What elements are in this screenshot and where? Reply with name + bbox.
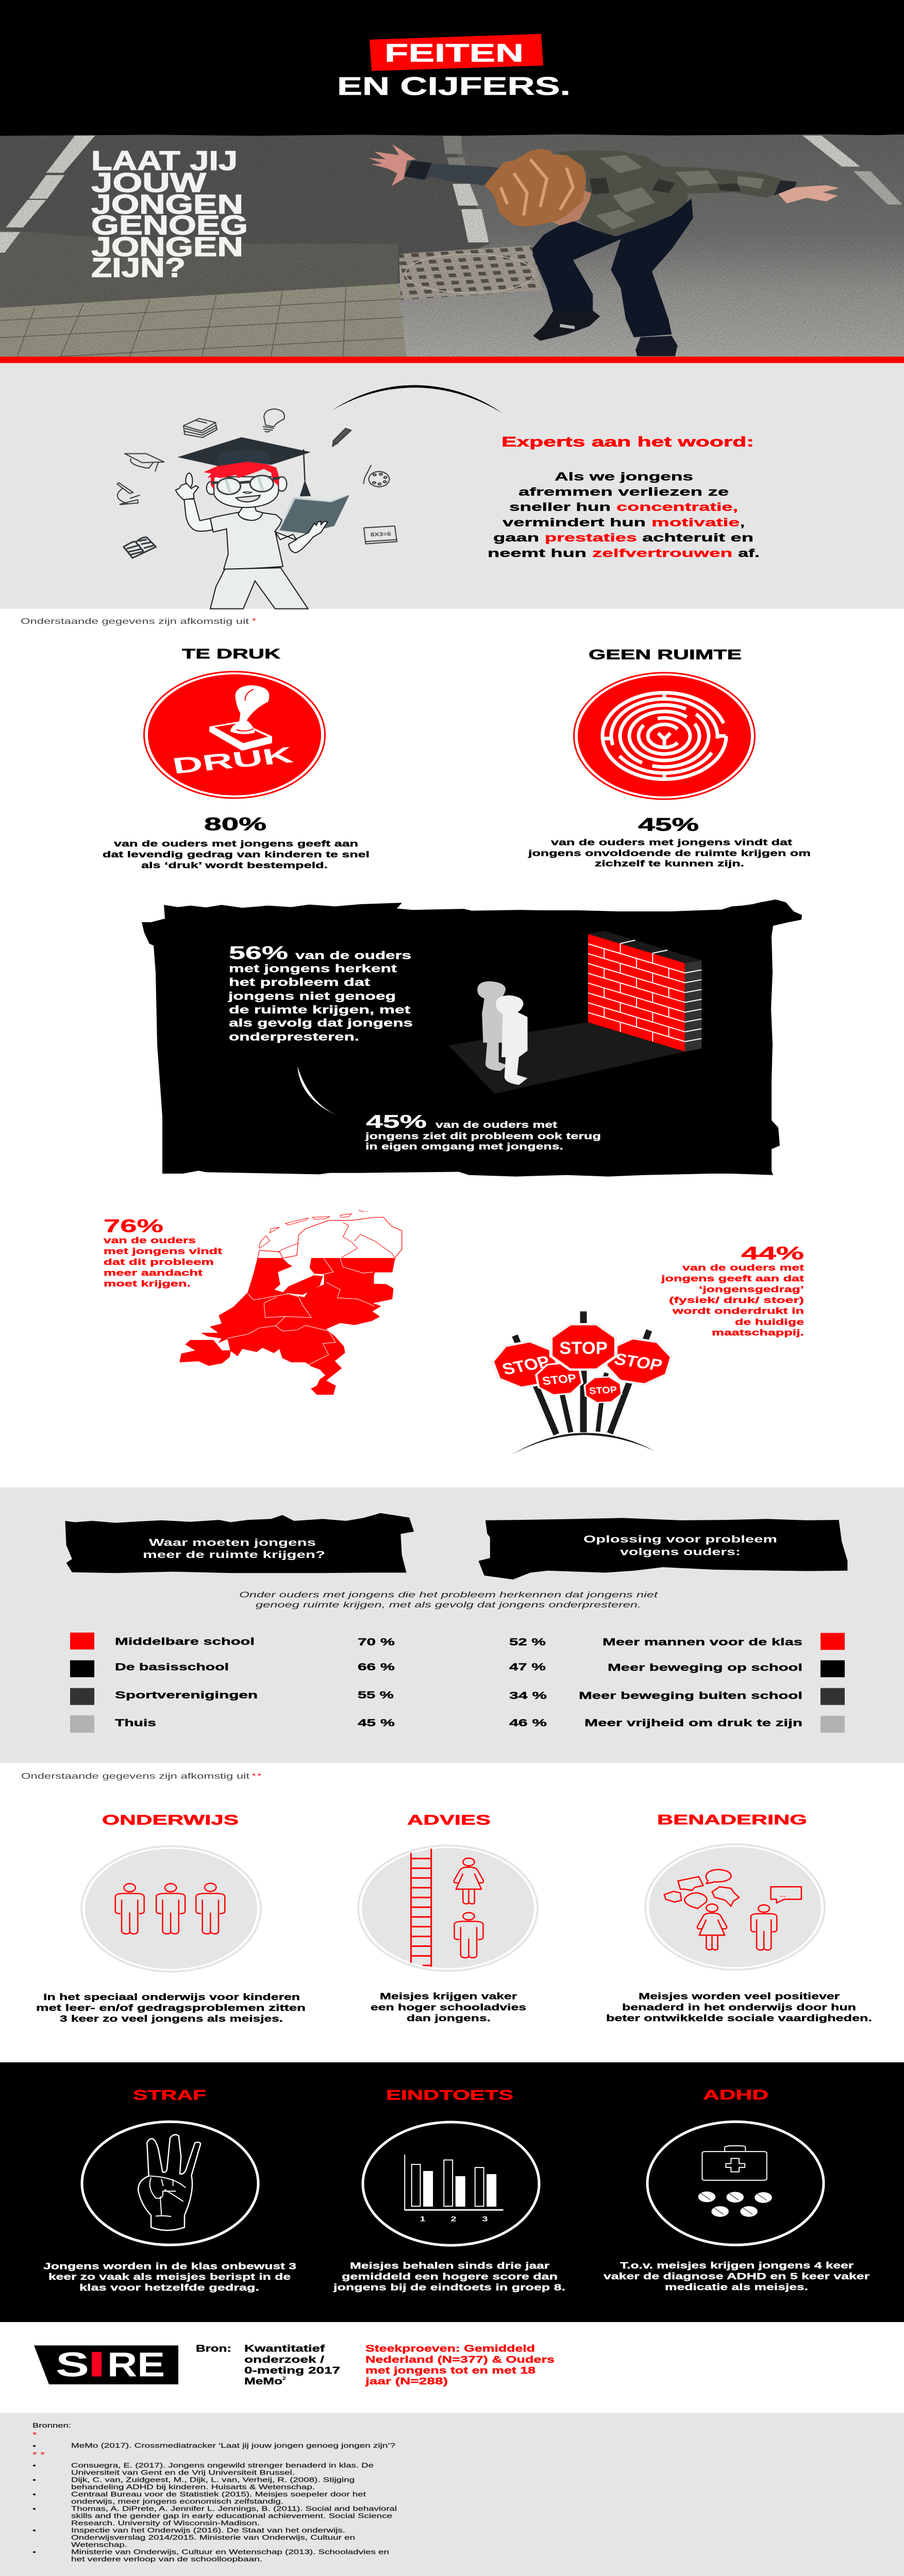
source note 2: ** — [252, 1771, 261, 1780]
list: oplossingen: Meer beweging op school — [608, 1662, 802, 1673]
text: expert statement: af. — [738, 547, 760, 560]
title: Feiten: FEITEN — [384, 39, 524, 67]
text: 80% caption — [103, 839, 370, 870]
list: oplossingen: Meer vrijheid om druk te zijn — [584, 1718, 802, 1728]
stat: 56%: onderpresteren. — [229, 1031, 359, 1043]
banner: waar moeten jongens: Waar moeten jongens — [149, 1537, 316, 1548]
panel: bronnen: Research. University of Wisconsin-Madison. — [71, 2519, 260, 2527]
banner: oplossing — [478, 1518, 847, 1580]
icon: books stack — [183, 418, 217, 437]
heading: geen ruimte: GEEN RUIMTE — [589, 647, 742, 663]
panel: black grunge — [142, 900, 802, 1177]
stat: 45% eigen omgang — [365, 1112, 601, 1151]
list: oplossingen: 46 % — [509, 1718, 547, 1728]
text: eindtoets: Meisjes behalen sinds drie jaar — [350, 2260, 550, 2271]
icon: medicine circle — [647, 2122, 824, 2245]
stat: 44%: 44% — [741, 1244, 804, 1264]
panel: bronnen: Ministerie van Onderwijs, Cultuur en Wetenschap (2013). Schooladvies en — [71, 2548, 389, 2556]
text: italic note: genoeg ruimte krijgen, met als gevolg dat jongens onderpresteren. — [256, 1600, 641, 1609]
stat: 44% — [661, 1244, 804, 1337]
panel: geen ruimte — [528, 647, 811, 869]
panel: black facts — [0, 2062, 904, 2322]
text: expert statement: neemt hun — [488, 547, 587, 560]
panel: bronnen: Bronnen: — [32, 2422, 71, 2429]
ijsselmeer — [274, 1258, 324, 1297]
grain overlay — [0, 134, 904, 357]
panel: bronnen: • — [32, 2526, 36, 2534]
stat: 76%: meer aandacht — [104, 1268, 203, 1278]
text: expert statement: vermindert hun — [503, 516, 646, 529]
text: 45% caption: jongens onvoldoende de ruimte krijgen om — [528, 849, 811, 858]
text: expert statement: prestaties — [545, 531, 637, 544]
text: adhd: medicatie als meisjes. — [665, 2282, 808, 2292]
icon: open book — [124, 537, 156, 558]
road markings — [0, 135, 902, 253]
photo: jumping boy — [369, 144, 840, 356]
stat: 44%: de huidige — [735, 1317, 804, 1327]
panel: bronnen: MeMo (2017). Crossmediatracker ‘Laat jij jouw jongen genoeg jongen zijn’? — [71, 2442, 395, 2449]
list: waar meer ruimte: 45 % — [358, 1718, 395, 1728]
icon: stamp circle: DRUK — [170, 742, 295, 779]
text: italic note: Onder ouders met jongens die het probleem herkennen dat jongens niet — [239, 1590, 659, 1599]
stat: 44%: ‘jongensgedrag’ — [699, 1284, 804, 1294]
stat: 56% — [228, 943, 413, 1043]
heading: onderwijs: ONDERWIJS — [102, 1812, 239, 1827]
panel: experts — [0, 363, 904, 609]
header band — [0, 0, 904, 135]
text: expert statement: , — [740, 516, 745, 529]
text: bron: Kwantitatief — [244, 2343, 325, 2353]
panel: bronnen: Thomas, A. DiPrete, A. Jennifer L. Jennings, B. (2011). Social and behavioral — [71, 2505, 397, 2513]
text: 45% caption — [528, 838, 811, 869]
text: benadering: beter ontwikkelde sociale vaardigheden. — [606, 2013, 872, 2023]
chalkboard text: 8X3=6 — [370, 531, 391, 538]
panel: bronnen: Dijk, C. van, Zuidgeest, M., Dijk, L. van, Verheij, R. (2008). Stijging — [71, 2476, 355, 2484]
sign bottom left — [533, 1361, 585, 1397]
stat: 44%: maatschappij. — [712, 1328, 804, 1337]
stat: 56%: van de ouders — [295, 950, 411, 961]
list: oplossingen: 47 % — [509, 1662, 546, 1673]
text: bron: Bron: — [196, 2343, 231, 2353]
sign left — [486, 1336, 565, 1393]
list: oplossingen: Meer mannen voor de klas — [602, 1636, 802, 1648]
stat: 76%: met jongens vindt — [104, 1246, 222, 1256]
text: steekproeven: Nederland (N=377) & Ouders — [365, 2354, 555, 2365]
sign left: STOP — [499, 1352, 553, 1379]
stat: 76%: dat dit probleem — [104, 1257, 214, 1267]
panel: bronnen: behandeling ADHD bij kinderen. Huisarts & Wetenschap. — [71, 2483, 315, 2491]
stat: 76%: moet krijgen. — [104, 1279, 191, 1289]
arc decoration — [332, 385, 503, 413]
province borders — [228, 1258, 375, 1365]
text: benadering — [606, 1991, 872, 2023]
panel: bronnen: • — [32, 2548, 36, 2556]
text: adhd — [604, 2260, 870, 2292]
list: waar meer ruimte: 55 % — [358, 1690, 394, 1701]
sign centre — [549, 1323, 617, 1371]
question: laat jij jouw jongen genoeg jongen zijn: JONGEN — [91, 189, 243, 219]
question: laat jij jouw jongen genoeg jongen zijn: LAAT JIJ — [91, 145, 238, 176]
stat: 56%: het probleem dat — [229, 977, 370, 989]
icon: pencil — [332, 428, 351, 446]
heading: straf: STRAF — [133, 2088, 206, 2103]
panel: bronnen: • — [32, 2461, 36, 2469]
sign centre: STOP — [559, 1338, 608, 1358]
stat: 76%: 76% — [104, 1216, 163, 1236]
source note 2: Onderstaande gegevens zijn afkomstig uit — [21, 1772, 250, 1781]
list: waar meer ruimte: Middelbare school — [115, 1636, 255, 1647]
panel: bronnen: Wetenschap. — [71, 2541, 127, 2549]
dark asphalt — [0, 134, 490, 308]
icon: bar chart circle: 2 — [450, 2214, 457, 2223]
icon: hand circle — [82, 2122, 258, 2245]
text: eindtoets: gemiddeld een hogere score dan — [342, 2271, 558, 2282]
panel: bronnen — [0, 2413, 904, 2576]
icon: small mortarboard — [125, 453, 164, 471]
logo: sire: RE — [107, 2346, 165, 2384]
sign right — [600, 1334, 677, 1388]
list: waar meer ruimte: 66 % — [358, 1662, 395, 1673]
heading: benadering: BENADERING — [657, 1811, 807, 1827]
text: onderwijs: 3 keer zo veel jongens als meisjes. — [60, 2013, 283, 2024]
text: expert statement: gaan — [493, 531, 539, 544]
illustration: graduate boy — [117, 409, 397, 609]
text: expert statement — [488, 470, 760, 560]
figures: two boys — [477, 981, 528, 1085]
title: en cijfers: EN CIJFERS. — [337, 72, 571, 100]
curve decoration — [297, 1066, 337, 1115]
text: adhd: vaker de diagnose ADHD en 5 keer vaker — [604, 2271, 870, 2281]
text: benadering: benaderd in het onderwijs door hun — [622, 2002, 856, 2012]
text: advies: dan jongens. — [407, 2013, 491, 2023]
panel: bronnen: • — [32, 2476, 36, 2484]
text: italic note — [239, 1590, 659, 1609]
panel: bronnen: het verdere verloop van de schoolloopbaan. — [71, 2555, 262, 2563]
sign bottom right — [583, 1376, 623, 1404]
question: laat jij jouw jongen genoeg jongen zijn: ZIJN? — [91, 252, 186, 283]
list: oplossingen — [509, 1633, 845, 1733]
stat: 56%: 56% — [229, 943, 288, 963]
panel: onderwijs — [36, 1812, 306, 2024]
text: eindtoets — [333, 2260, 565, 2293]
paving bricks — [0, 284, 407, 357]
text: 80% caption: als ‘druk’ wordt bestempeld. — [141, 860, 328, 870]
panel: bronnen: • — [32, 2504, 36, 2513]
panel: bronnen: Inspectie van het Onderwijs (2016). De Staat van het onderwijs. — [71, 2527, 345, 2534]
stat: 44%: van de ouders met — [682, 1263, 804, 1273]
source note 1: * — [252, 617, 256, 625]
text: expert statement: concentratie, — [616, 500, 738, 513]
list: oplossingen: 52 % — [509, 1636, 546, 1648]
text: steekproeven: jaar (N=288) — [365, 2376, 448, 2386]
panel: bronnen: onderwijs, meer jongens economisch zelfstandig. — [71, 2498, 283, 2505]
panel: bronnen: skills and the gender gap in early educational achievement. Social Science — [71, 2512, 392, 2520]
panel: advies — [358, 1812, 538, 2023]
text: expert statement: achteruit en — [642, 531, 754, 544]
list: waar meer ruimte: Thuis — [115, 1718, 156, 1728]
question: laat jij jouw jongen genoeg jongen zijn — [91, 145, 248, 283]
list: oplossingen: 34 % — [509, 1690, 547, 1701]
text: straf: Jongens worden in de klas onbewust 3 — [43, 2261, 296, 2271]
panel: bronnen: • — [32, 2490, 36, 2498]
text: onderwijs — [36, 1992, 306, 2024]
banner: waar moeten jongens: meer de ruimte krijgen? — [143, 1549, 325, 1561]
title: Feiten — [370, 34, 543, 71]
sign bottom left: STOP — [541, 1371, 577, 1387]
text: onderwijs: met leer- en/of gedragsproblemen zitten — [36, 2003, 306, 2013]
text: straf: klas voor hetzelfde gedrag. — [79, 2282, 259, 2293]
text: advies — [371, 1991, 526, 2023]
stat: 56%: als gevolg dat jongens — [229, 1018, 413, 1029]
heading: advies: ADVIES — [407, 1812, 491, 1827]
banner: oplossing: volgens ouders: — [620, 1546, 741, 1557]
text: steekproeven — [365, 2343, 555, 2386]
icon: stamp circle — [144, 672, 325, 798]
stat: 76%: van de ouders — [104, 1235, 196, 1245]
source note 1: Onderstaande gegevens zijn afkomstig uit — [21, 617, 249, 626]
map: netherlands — [180, 1210, 402, 1395]
sign bottom right: STOP — [589, 1384, 617, 1396]
list: waar meer ruimte: 70 % — [358, 1636, 395, 1648]
text: bron — [196, 2343, 340, 2386]
text: onderwijs: In het speciaal onderwijs voor kinderen — [43, 1992, 300, 2002]
panel: bronnen: Centraal Bureau voor de Statistiek (2015). Meisjes soepeler door het — [71, 2490, 366, 2498]
icon: speech bubbles circle: ... — [780, 1892, 786, 1898]
icon: light bulb — [263, 409, 284, 432]
red fill — [180, 1258, 395, 1394]
icon: stop signs — [486, 1311, 677, 1454]
text: adhd: T.o.v. meisjes krijgen jongens 4 keer — [620, 2260, 854, 2270]
text: advies: Meisjes krijgen vaker — [380, 1991, 517, 2002]
text: eindtoets: jongens bij de eindtoets in groep 8. — [333, 2282, 565, 2293]
column: straf — [43, 2088, 296, 2293]
icon: chalkboard frame — [364, 526, 397, 544]
stat: 44%: (fysiek/ druk/ stoer) — [669, 1295, 804, 1305]
icon: speech bubbles circle — [645, 1844, 825, 1970]
stat: 56%: jongens niet genoeg — [228, 990, 396, 1002]
panel: bronnen: Consuegra, E. (2017). Jongens ongewild strenger benaderd in klas. De — [71, 2462, 374, 2469]
column: adhd — [604, 2087, 870, 2292]
list: waar meer ruimte — [70, 1633, 395, 1733]
panel: ruimte en oplossing — [0, 1487, 904, 1763]
stat: 76% — [104, 1216, 222, 1289]
icon: maze circle — [574, 673, 755, 799]
text: bron: MeMo — [244, 2376, 282, 2386]
heading: eindtoets: EINDTOETS — [386, 2088, 513, 2103]
panel: bronnen: * — [32, 2431, 37, 2440]
text: benadering: Meisjes worden veel positiever — [639, 1991, 840, 2002]
text: bron: 0-meting 2017 — [244, 2365, 340, 2376]
stat: 45%: 45% — [638, 815, 699, 835]
question: laat jij jouw jongen genoeg jongen zijn: JOUW — [91, 167, 206, 198]
stat: 56%: met jongens herkent — [229, 963, 397, 975]
list: oplossingen: Meer beweging buiten school — [579, 1690, 802, 1701]
panel: bronnen: Onderwijsverslag 2014/2015. Ministerie van Onderwijs, Cultuur en — [71, 2534, 355, 2541]
panel: bronnen: ** — [32, 2451, 45, 2460]
column: eindtoets — [333, 2088, 565, 2293]
question: laat jij jouw jongen genoeg jongen zijn: JONGEN — [91, 231, 243, 262]
text: advies: een hoger schooladvies — [371, 2002, 526, 2012]
icon: bar chart circle: 3 — [482, 2214, 488, 2223]
stat: 80%: 80% — [204, 815, 266, 835]
text: expert statement: zelfvertrouwen — [592, 547, 732, 560]
logo: sire: S — [56, 2346, 89, 2384]
icon: ladder circle — [358, 1845, 538, 1971]
sign right: STOP — [612, 1350, 664, 1375]
icon: palette — [363, 465, 389, 487]
text: expert statement: Als we jongens — [555, 470, 693, 483]
logo: sire — [34, 2346, 178, 2384]
floor — [448, 1022, 685, 1094]
stat: 45% eigen omgang: van de ouders met — [436, 1120, 557, 1130]
text: steekproeven: met jongens tot en met 18 — [365, 2365, 535, 2376]
list: waar meer ruimte: De basisschool — [115, 1662, 229, 1673]
text: 45% caption: van de ouders met jongens vindt dat — [551, 838, 792, 847]
stat: 44%: jongens geeft aan dat — [661, 1274, 804, 1283]
text: 80% caption: dat levendig gedrag van kinderen te snel — [103, 850, 370, 859]
text: 80% caption: van de ouders met jongens geeft aan — [114, 839, 358, 849]
text: straf: keer zo vaak als meisjes berispt in de — [48, 2272, 291, 2282]
heading: adhd: ADHD — [703, 2087, 768, 2103]
panel: bronnen: • — [32, 2442, 36, 2450]
panel: benadering — [606, 1811, 872, 2023]
icon: bar chart circle — [363, 2122, 539, 2245]
panel: bronnen: Universiteit van Gent en de Vrij Universiteit Brussel. — [71, 2469, 295, 2477]
text: expert statement: afremmen verliezen ze — [518, 485, 729, 498]
torn top edge — [0, 134, 904, 136]
panel: te druk — [103, 647, 370, 870]
manhole cover — [399, 245, 543, 300]
stat: 45% eigen omgang: in eigen omgang met jongens. — [365, 1141, 563, 1151]
wadden islands — [259, 1210, 395, 1258]
banner: oplossing: Oplossing voor probleem — [583, 1534, 777, 1545]
icon: brick wall — [588, 931, 701, 1052]
stat: 56%: de ruimte krijgen, met — [229, 1004, 410, 1016]
icon: three boys circle — [81, 1846, 261, 1972]
stat: 44%: wordt onderdrukt in — [672, 1306, 804, 1316]
banner: waar moeten jongens — [65, 1513, 414, 1573]
question: laat jij jouw jongen genoeg jongen zijn: GENOEG — [91, 210, 248, 241]
hero photo — [0, 134, 904, 363]
list: waar meer ruimte: Sportverenigingen — [115, 1690, 258, 1701]
text: expert statement: motivatie — [651, 516, 740, 529]
icon: microscope — [117, 483, 140, 504]
text: 45% caption: zichzelf te kunnen zijn. — [595, 859, 744, 869]
text: bron: onderzoek / — [244, 2354, 325, 2365]
stat: 45% eigen omgang: jongens ziet dit probleem ook terug — [365, 1131, 601, 1141]
stat: 45% eigen omgang: 45% — [366, 1112, 427, 1132]
heading: te druk: TE DRUK — [182, 647, 280, 662]
text: steekproeven: Steekproeven: Gemiddeld — [365, 2343, 535, 2353]
text: straf — [43, 2261, 296, 2293]
text: bron: 2 — [282, 2376, 286, 2381]
icon: bar chart circle: 1 — [420, 2214, 426, 2223]
text: expert statement: sneller hun — [509, 500, 611, 513]
heading: experts: Experts aan het woord: — [501, 434, 754, 449]
red divider bar — [0, 357, 904, 363]
